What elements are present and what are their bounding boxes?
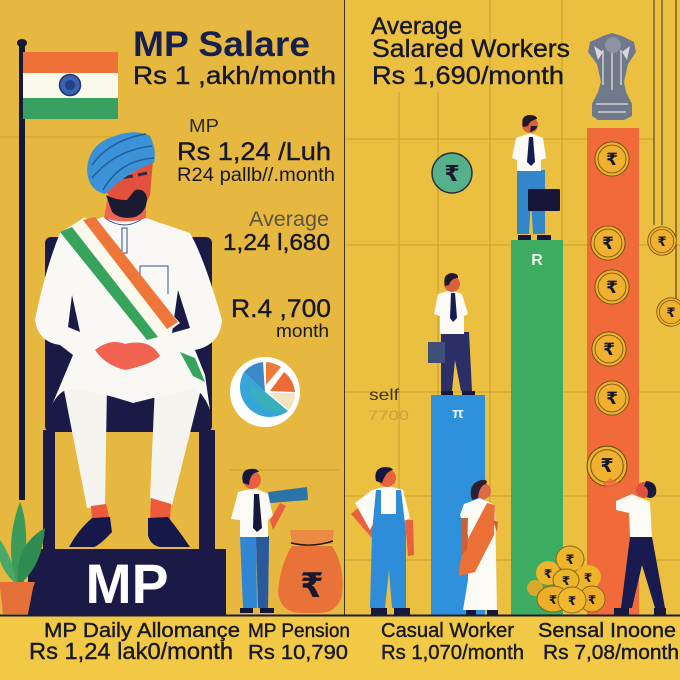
shirt: [355, 486, 410, 530]
casual worker label: Casual Worker: [381, 620, 514, 642]
briefcase: [528, 189, 560, 211]
coin symbols: ₹: [565, 553, 575, 568]
seasonal income label: Sensal Inoone: [538, 620, 676, 642]
stat: amount: R.4 ,700: [231, 295, 331, 323]
orange drape: [459, 503, 495, 576]
bars: R: [531, 252, 543, 269]
briefcase: [428, 342, 445, 363]
MP daily allowance value: Rs 1,24 lak0/month: [29, 638, 233, 664]
coin pile: [527, 546, 605, 613]
shirt: [434, 290, 468, 334]
trousers: [240, 536, 269, 608]
kurta: [35, 217, 222, 410]
stat: average value: 1,24 l,680: [223, 229, 330, 255]
self label: [368, 387, 409, 423]
icon: national emblem: [588, 33, 636, 120]
rupee symbol: ₹: [300, 566, 324, 606]
middle worker on blue bar: [428, 273, 475, 395]
tricolour sash: [60, 217, 205, 382]
tie: [253, 494, 262, 532]
stat: month: month: [276, 321, 329, 341]
coin symbols: [544, 553, 596, 608]
arms: [351, 508, 414, 556]
seasonal income value: Rs 7,08/month: [543, 642, 679, 664]
icon: money bag: [278, 530, 343, 613]
icon: potted plant: [0, 502, 45, 614]
bars: [431, 128, 639, 615]
collar and pocket: [105, 218, 168, 296]
stat: average label: Average: [249, 208, 329, 231]
woman in sari: [459, 480, 498, 616]
shoes: [240, 608, 274, 613]
head: [471, 480, 491, 500]
bar marks: π: [452, 405, 464, 422]
shoes: [614, 608, 666, 615]
coin icons on orange bar: ₹: [666, 306, 676, 321]
flag pole: [17, 39, 27, 500]
coin symbols: ₹: [549, 593, 557, 607]
shoes: [441, 391, 475, 395]
legs: [63, 385, 202, 520]
white sari: [460, 498, 497, 610]
coin icons on orange bar: ₹: [600, 455, 614, 477]
coin icons on orange bar: ₹: [606, 278, 618, 298]
money roll: [268, 487, 308, 503]
blue bar: [431, 395, 485, 615]
bottom labels: [29, 620, 679, 664]
baseline: [0, 614, 680, 616]
coin symbols: ₹: [584, 571, 592, 585]
heading: MP Salare: [133, 25, 310, 64]
chart: pie: [230, 357, 300, 427]
MP podium: [28, 549, 226, 615]
shoes: [69, 517, 190, 547]
head: [636, 481, 656, 498]
coin symbols: ₹: [568, 594, 576, 608]
tie: [527, 137, 535, 166]
top worker on green bar: [512, 115, 560, 240]
neck and face: [104, 160, 153, 222]
coin symbols: ₹: [562, 574, 570, 588]
arms: [461, 518, 498, 555]
head: [444, 273, 460, 292]
coin icons on orange bar: ₹: [606, 150, 618, 170]
title: average salaried workers: [371, 13, 570, 90]
overalls: [370, 490, 406, 608]
MP pension value: Rs 10,790: [248, 642, 348, 664]
chair gaps beside torso: [68, 290, 190, 333]
icon: green rupee coin: ₹: [444, 162, 460, 187]
hands: [95, 342, 160, 370]
head: [375, 467, 396, 487]
raised arm: [603, 478, 640, 505]
arm holding money: [270, 503, 286, 530]
MP pension label: MP Pension: [248, 621, 350, 642]
heading line 3: Rs 1,690/month: [372, 62, 564, 90]
coin icons on orange bar: [587, 142, 680, 486]
title: MP Salary: [133, 25, 336, 90]
self label: 7700: [368, 407, 409, 423]
stat: MP value: Rs 1,24 /Luh: [177, 138, 331, 166]
trousers: [621, 537, 665, 608]
tricolour flag: [23, 52, 118, 119]
heading line 2: Salared Workers: [372, 35, 570, 63]
coin icons on orange bar: ₹: [657, 235, 667, 250]
tie: [450, 293, 457, 322]
turban: [87, 132, 155, 194]
chair: [43, 237, 215, 550]
green bar: [511, 240, 563, 615]
coin icons on orange bar: ₹: [602, 234, 614, 254]
man reaching for coin: [603, 478, 666, 615]
casual worker value: Rs 1,070/month: [381, 642, 524, 664]
head: [522, 115, 538, 133]
coin icons on orange bar: ₹: [606, 389, 618, 409]
coin icons on orange bar: ₹: [603, 340, 615, 360]
shoes: [518, 235, 551, 240]
left stats column: [177, 116, 335, 341]
flag: [17, 39, 118, 500]
casual worker in overalls: [351, 467, 414, 616]
shirt: [231, 488, 273, 537]
small man with money: [231, 469, 308, 613]
icon: green rupee coin: [432, 153, 472, 193]
heading line 1: Average: [371, 13, 462, 40]
heading subtitle: Rs 1 ,akh/month: [133, 62, 336, 90]
shoes: [371, 608, 410, 616]
trousers: [441, 332, 472, 391]
MP daily allowance label: MP Daily Allomançe: [44, 620, 240, 642]
feet: [466, 610, 498, 616]
MP seated figure: [35, 132, 222, 550]
trousers: [517, 170, 545, 234]
shirt: [616, 494, 652, 537]
podium label: MP: [86, 552, 168, 615]
shirt: [512, 133, 546, 171]
orange bar: [587, 128, 639, 615]
stat: MP note: R24 pallb//.month: [177, 165, 335, 186]
coin symbols: ₹: [544, 567, 552, 581]
head: [242, 469, 261, 489]
stat: MP label: MP: [189, 116, 219, 136]
self label: self: [369, 387, 400, 404]
coin symbols: ₹: [588, 593, 596, 607]
